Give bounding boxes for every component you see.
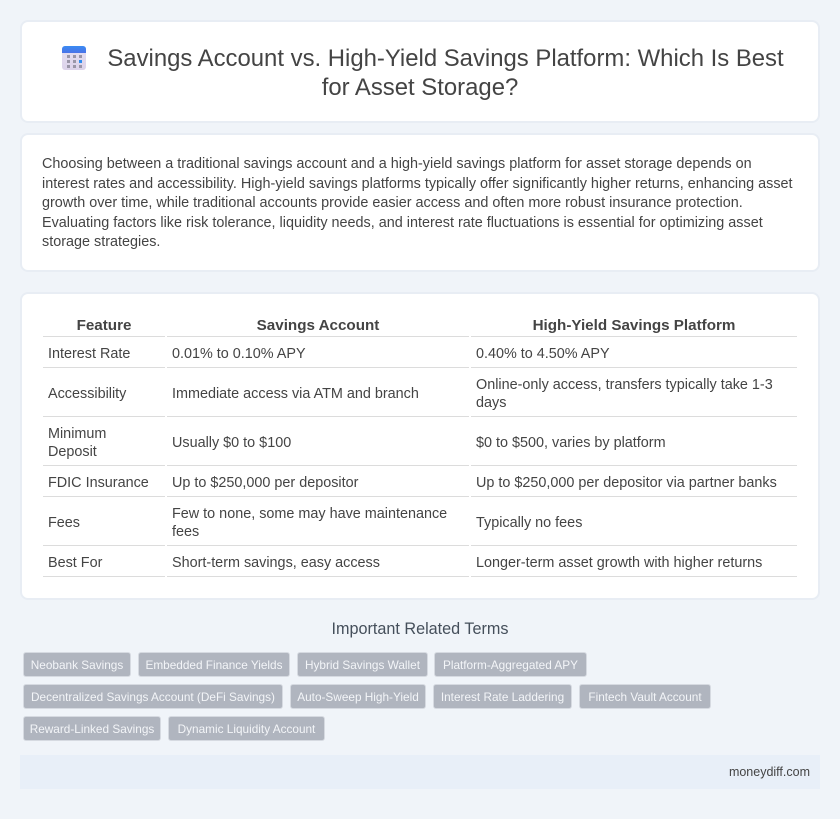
comparison table: Minimum	[48, 426, 106, 442]
related term tags: Fintech Vault Account	[588, 690, 702, 704]
header panel	[20, 20, 820, 123]
comparison table: Online-only access, transfers typically take 1-3	[476, 377, 773, 393]
intro panel	[20, 133, 820, 272]
intro text: growth over time, while traditional accounts provide easier access and often more robust insurance protection.	[42, 195, 743, 211]
comparison table: Usually $0 to $100	[172, 435, 291, 451]
comparison table: Deposit	[48, 444, 97, 460]
comparison table: Short-term savings, easy access	[172, 555, 380, 571]
intro text: Evaluating factors like risk tolerance, liquidity needs, and interest rate fluctuations is essential for optimizing asset	[42, 214, 763, 230]
comparison table: Few to none, some may have maintenance	[172, 506, 447, 522]
related term tags: Decentralized Savings Account (DeFi Savings)	[31, 690, 275, 704]
comparison table: fees	[172, 524, 199, 540]
comparison table: 0.01% to 0.10% APY	[172, 346, 306, 362]
icon: calendar	[62, 46, 86, 70]
title: for Asset Storage?	[322, 74, 518, 101]
comparison table: days	[476, 395, 506, 411]
related term tags	[23, 652, 711, 741]
related term tags: Reward-Linked Savings	[30, 722, 154, 736]
comparison table: $0 to $500, varies by platform	[476, 435, 666, 451]
comparison table: Typically no fees	[476, 515, 582, 531]
footer bar	[20, 755, 820, 789]
comparison table: Best For	[48, 555, 102, 571]
comparison table: Up to $250,000 per depositor	[172, 475, 358, 491]
comparison table	[43, 317, 797, 577]
comparison table: Accessibility	[48, 386, 126, 402]
related term tags: Interest Rate Laddering	[441, 690, 564, 704]
comparison table: FDIC Insurance	[48, 475, 149, 491]
comparison table: Longer-term asset growth with higher returns	[476, 555, 762, 571]
comparison table: Interest Rate	[48, 346, 130, 362]
related term tags: Auto-Sweep High-Yield	[297, 690, 419, 704]
comparison table: High-Yield Savings Platform	[533, 317, 735, 334]
comparison table: Immediate access via ATM and branch	[172, 386, 419, 402]
comparison table: 0.40% to 4.50% APY	[476, 346, 610, 362]
related term tags: Neobank Savings	[31, 658, 123, 672]
comparison table: Up to $250,000 per depositor via partner banks	[476, 475, 777, 491]
related term tags: Platform-Aggregated APY	[443, 658, 578, 672]
related term tags: Dynamic Liquidity Account	[178, 722, 315, 736]
footer text: moneydiff.com	[729, 765, 810, 779]
title: Savings Account vs. High-Yield Savings Platform: Which Is Best	[107, 45, 784, 72]
intro text	[42, 156, 793, 250]
related term tags: Embedded Finance Yields	[145, 658, 283, 672]
related term tags: Hybrid Savings Wallet	[305, 658, 420, 672]
intro text: interest rates and accessibility. High-yield savings platforms typically offer significantly higher returns, enhancing asset	[42, 176, 793, 192]
related terms heading: Important Related Terms	[332, 620, 508, 638]
intro text: Choosing between a traditional savings account and a high-yield savings platform for asset storage depends on	[42, 156, 752, 172]
comparison table panel	[20, 292, 820, 600]
comparison table: Fees	[48, 515, 80, 531]
intro text: storage strategies.	[42, 234, 160, 250]
comparison table: Feature	[77, 317, 131, 334]
title	[107, 45, 784, 101]
comparison table: Savings Account	[257, 317, 379, 334]
